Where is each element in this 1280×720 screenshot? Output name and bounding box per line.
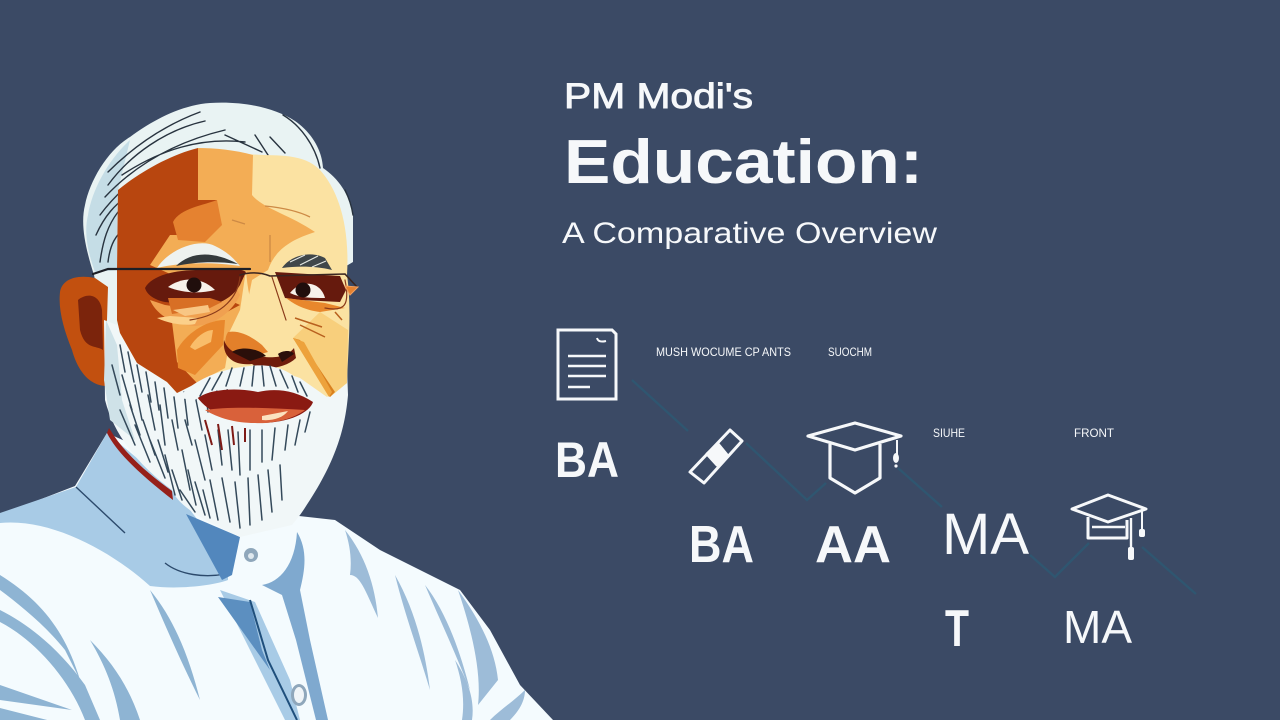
degree: MA first: MA	[942, 502, 1029, 567]
mouth and moustache	[178, 365, 315, 450]
collar band	[0, 433, 228, 587]
icon: graduation cap shield	[808, 423, 901, 493]
beard	[104, 320, 348, 537]
orange patch	[173, 200, 222, 242]
collar flap	[232, 530, 300, 581]
placket shadows	[220, 590, 300, 720]
left eye socket	[145, 269, 246, 306]
degree: BA second: BA	[689, 516, 754, 574]
shirt fold shadows	[0, 575, 200, 720]
zigzag timeline	[632, 380, 1196, 594]
title block	[562, 77, 937, 250]
icon: graduation cap	[1072, 495, 1146, 560]
neck red strip	[107, 428, 173, 500]
icon: document	[558, 330, 616, 399]
forehead creases	[232, 206, 310, 262]
right eye	[290, 284, 325, 298]
button	[291, 684, 307, 706]
cheek orange	[177, 320, 225, 375]
face	[117, 148, 349, 397]
left eyebrow	[157, 243, 240, 268]
icon: diploma	[690, 430, 742, 483]
small labels	[656, 345, 1115, 440]
degree: BA first: BA	[555, 432, 619, 488]
pale skin	[117, 152, 349, 397]
degree: AA: AA	[815, 516, 891, 574]
lower lid band	[150, 285, 240, 326]
tan skin	[118, 148, 315, 383]
degree labels	[555, 432, 1132, 658]
right cheek wedge	[293, 312, 348, 397]
portrait illustration	[0, 103, 553, 720]
dark orange shadow side	[117, 148, 240, 393]
left eye	[168, 280, 215, 292]
glasses	[93, 269, 358, 320]
degree: MA second: MA	[1063, 601, 1132, 653]
label: caption three: SIUHE	[933, 426, 965, 440]
title line: PM Modi's: PM Modi's	[564, 77, 753, 116]
subtitle: A Comparative Overview	[562, 217, 937, 250]
label: document caption: MUSH WOCUME CP ANTS	[656, 345, 791, 359]
right eye socket	[275, 272, 346, 302]
inner collar shadow	[186, 514, 240, 580]
label: caption four: FRONT	[1074, 426, 1115, 440]
nose	[226, 270, 296, 365]
right eyebrow	[282, 254, 332, 270]
degree: T: T	[945, 600, 969, 658]
shirt	[0, 433, 553, 720]
label: caption two: SUOCHM	[828, 345, 872, 359]
title line: Education: Education:	[564, 128, 923, 197]
hair	[83, 103, 353, 400]
ear	[60, 277, 108, 386]
